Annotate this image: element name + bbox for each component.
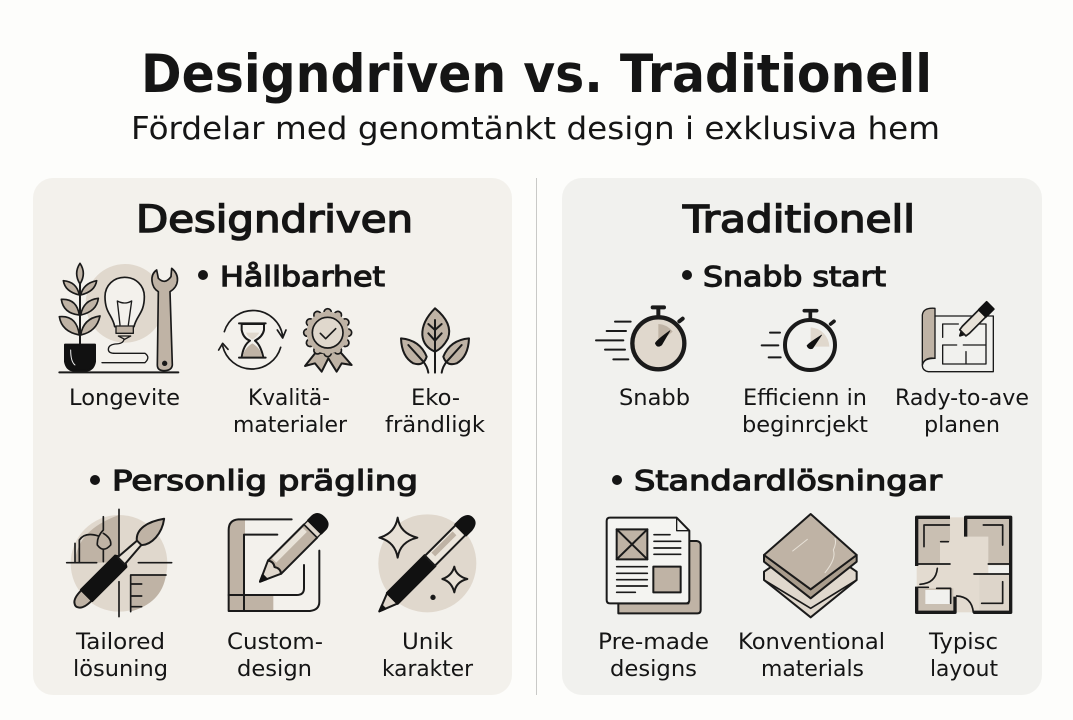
icon: paintbrush [67, 509, 172, 617]
subheading: personlig prägling: Personlig prägling [112, 465, 418, 497]
label: konventional materials: materials [761, 657, 864, 682]
icon: blueprint with pencil [922, 302, 994, 372]
icon: leaves [401, 308, 469, 373]
label: pre-made designs: Pre-made [598, 630, 709, 655]
label: eko-frändligk: Eko- [411, 386, 460, 411]
label: rady-to-ave planen: Rady-to-ave [895, 386, 1029, 411]
label: konventional materials: Konventional [738, 630, 885, 655]
icon: plant, bulb and wrench [59, 263, 178, 372]
label: pre-made designs: designs [610, 657, 697, 682]
label: kvalitä-materialer: materialer [233, 413, 348, 438]
panel: traditionell [562, 178, 1042, 695]
label: custom-design [227, 630, 323, 682]
heading: designdriven: Designdriven [136, 198, 413, 241]
label: unik karakter [382, 630, 474, 682]
icon: stopwatch [762, 311, 835, 370]
heading: traditionell: Traditionell [682, 198, 915, 241]
label: typisc layout [928, 630, 998, 682]
label: kvalitä-materialer [233, 386, 348, 438]
label: custom-design: Custom- [227, 630, 323, 655]
subheading: hållbarhet: Hållbarhet [220, 260, 385, 293]
icon: pencil and frame [229, 511, 331, 611]
label: custom-design: design [237, 657, 312, 682]
label: tailored lösuning [73, 630, 168, 682]
label: tailored lösuning: lösuning [73, 657, 168, 682]
icon: quality badge [304, 309, 352, 372]
label: typisc layout: Typisc [928, 630, 998, 655]
label: unik karakter: Unik [402, 630, 453, 655]
divider [536, 178, 537, 695]
label: pre-made designs [598, 630, 709, 682]
label: tailored lösuning: Tailored [75, 630, 165, 655]
label: eko-frändligk [385, 386, 485, 438]
label: longevite: Longevite [69, 386, 180, 411]
panel: designdriven [33, 178, 512, 695]
subtitle: Fördelar med genomtänkt design i exklusiva hem [131, 111, 940, 147]
label: rady-to-ave planen: planen [924, 413, 1000, 438]
icon: floor plan [917, 517, 1011, 612]
icon: pre-made documents [607, 518, 701, 613]
label: typisc layout: layout [930, 657, 998, 682]
icon: hourglass with arrows [219, 310, 286, 369]
label: efficienn in beginrcjekt [742, 386, 868, 438]
icon: pen with sparkles [374, 513, 478, 617]
label: eko-frändligk: frändligk [385, 413, 485, 438]
label: snabb: Snabb [619, 386, 690, 411]
icon: fast stopwatch [596, 307, 684, 369]
label: efficienn in beginrcjekt: beginrcjekt [742, 413, 868, 438]
label: kvalitä-materialer: Kvalitä- [248, 386, 330, 411]
label: unik karakter: karakter [382, 657, 474, 682]
label: rady-to-ave planen [895, 386, 1029, 438]
label: efficienn in beginrcjekt: Efficienn in [743, 386, 867, 411]
icon: stacked material tiles [764, 514, 857, 617]
title: Designdriven vs. Traditionell [141, 44, 932, 105]
subheading: snabb start: Snabb start [703, 261, 886, 293]
label: konventional materials [738, 630, 885, 682]
subheading: standardlösningar: Standardlösningar [634, 465, 943, 497]
